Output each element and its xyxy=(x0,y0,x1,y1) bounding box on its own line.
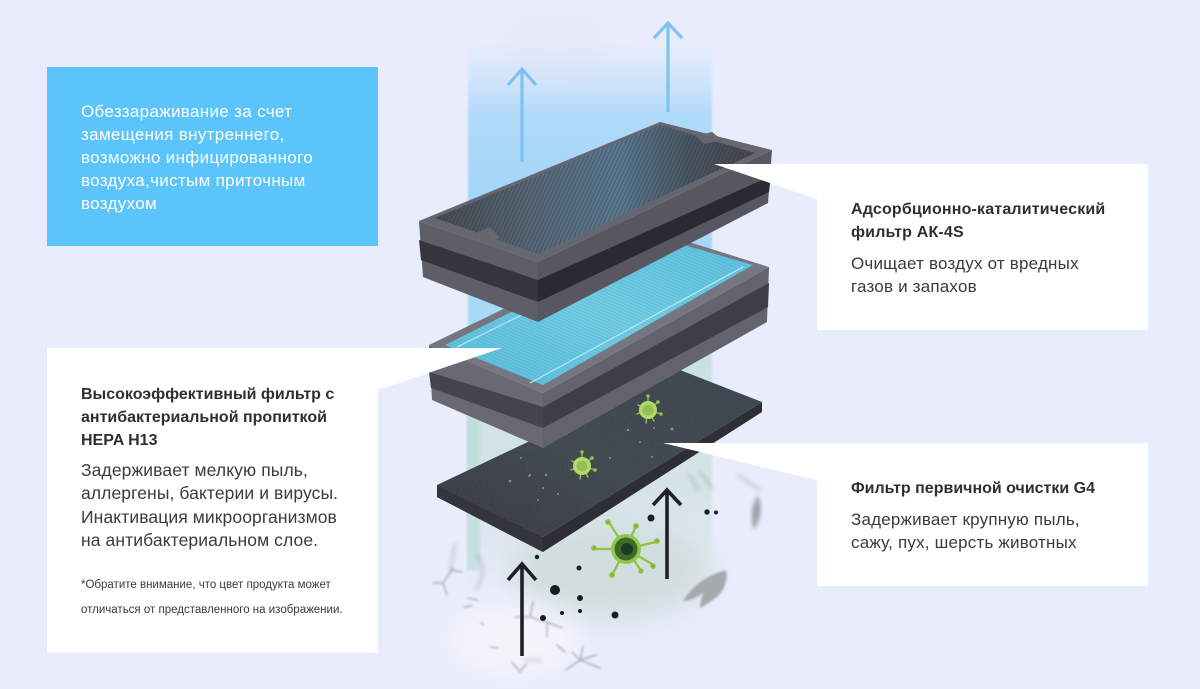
dust on foam xyxy=(509,427,674,501)
heading: G4: Фильтр первичной очистки G4 xyxy=(851,480,1095,497)
text: disinfection: воздухом xyxy=(81,194,157,213)
heading: HEPA: антибактериальной пропиткой xyxy=(81,409,327,426)
footnote xyxy=(81,578,343,616)
heading: HEPA: Высокоэффективный фильтр с xyxy=(81,386,334,403)
dust and feathers xyxy=(433,472,760,672)
virus on foam xyxy=(571,451,596,479)
frame tabs xyxy=(476,227,500,243)
dust particles xyxy=(535,509,718,621)
text: AK-4S description: Очищает воздух от вредных xyxy=(851,254,1079,273)
feather xyxy=(683,495,761,608)
text: G4 description: сажу, пух, шерсть животных xyxy=(851,533,1077,552)
filter AK-4S carbon xyxy=(419,122,772,322)
large virus xyxy=(592,520,659,577)
virus on foam xyxy=(637,395,662,423)
blue air arrows xyxy=(508,23,682,162)
panel: HEPA H13 xyxy=(47,348,378,653)
text: disinfection xyxy=(81,102,313,213)
filter HEPA H13 xyxy=(429,233,769,448)
panel: G4 xyxy=(817,443,1148,586)
text: HEPA description: Задерживает мелкую пыль, xyxy=(81,460,308,480)
text: disinfection: Обеззараживание за счет xyxy=(81,102,292,121)
heading: AK-4S: Адсорбционно-каталитический xyxy=(851,201,1105,218)
footnote: *Обратите внимание, что цвет продукта может xyxy=(81,579,331,591)
text: HEPA description: Инактивация микроорганизмов xyxy=(81,507,337,527)
text: disinfection: замещения внутреннего, xyxy=(81,125,285,144)
heading: HEPA xyxy=(81,386,334,449)
text: disinfection: воздуха,чистым приточным xyxy=(81,171,306,190)
text: disinfection: возможно инфицированного xyxy=(81,148,313,167)
text: AK-4S description xyxy=(851,254,1079,296)
black air arrows xyxy=(508,490,681,656)
panel: disinfection note xyxy=(47,67,378,246)
background air columns xyxy=(450,20,712,674)
heading: AK-4S: фильтр АК-4S xyxy=(851,224,964,241)
panel: AK-4S xyxy=(817,164,1148,330)
text: AK-4S description: газов и запахов xyxy=(851,277,977,296)
heading: AK-4S xyxy=(851,201,1105,241)
text: HEPA description xyxy=(81,460,338,550)
footnote: отличаться от представленного на изображении. xyxy=(81,604,343,616)
text: G4 description xyxy=(851,510,1080,552)
callout pointers xyxy=(375,164,820,481)
text: G4 description: Задерживает крупную пыль, xyxy=(851,510,1080,529)
text: HEPA description: аллергены, бактерии и вирусы. xyxy=(81,483,338,503)
filter G4 foam xyxy=(437,370,762,552)
text: HEPA description: на антибактериальном слое. xyxy=(81,530,318,550)
heading: HEPA: HEPA H13 xyxy=(81,432,157,449)
